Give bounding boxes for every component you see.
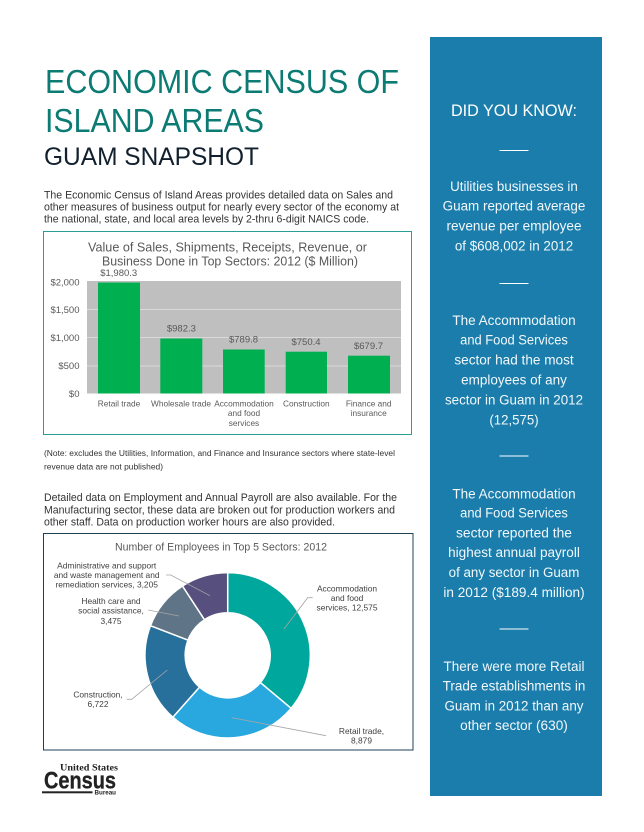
donut labels: and food (331, 593, 364, 603)
category labels (98, 399, 392, 428)
panel: bar chart of sales (44, 232, 412, 434)
fact: highest payroll: and Food Services (460, 506, 568, 520)
y axis labels: $1,500 (50, 305, 80, 316)
fact: retail establishments: Trade establishments in (443, 678, 585, 693)
fact: utilities: of $608,002 in 2012 (455, 238, 573, 253)
employment text (44, 492, 397, 528)
employment text: Manufacturing sector, these data are broken out for production workers and (44, 504, 395, 516)
donut labels: Accommodation (317, 584, 377, 594)
fact: utilities (443, 179, 585, 253)
y axis labels: $2,000 (50, 278, 80, 288)
donut labels: social assistance, (78, 606, 144, 616)
donut labels: services, 12,575 (316, 603, 378, 613)
sidebar heading: DID YOU KNOW: (451, 101, 577, 120)
fact: most employees: (12,575) (489, 412, 539, 427)
intro text: other measures of business output for nearly every sector of the economy at (44, 202, 399, 214)
y axis labels: $500 (58, 361, 80, 372)
fact: highest payroll: in 2012 ($189.4 million) (443, 585, 585, 600)
panel: donut chart of employees (44, 534, 413, 750)
category labels: insurance (351, 408, 387, 418)
donut labels: Health care and (81, 596, 141, 606)
bars (98, 282, 390, 394)
fact: retail establishments: Guam in 2012 than any (444, 698, 584, 713)
y axis labels (50, 278, 80, 400)
fact: most employees: The Accommodation (452, 313, 576, 328)
fact: retail establishments: other sector (630) (460, 718, 568, 733)
donut labels: Administrative and support (57, 560, 157, 570)
fact: highest payroll: The Accommodation (452, 486, 576, 501)
donut labels: remediation services, 3,205 (55, 580, 158, 590)
title: GUAM SNAPSHOT (44, 143, 259, 171)
title: ECONOMIC CENSUS OF (45, 63, 399, 100)
bar value labels: $750.4 (291, 337, 321, 348)
intro text: The Economic Census of Island Areas provides detailed data on Sales and (44, 190, 393, 202)
bar value labels: $982.3 (167, 324, 196, 335)
fact: most employees: sector in Guam in 2012 (445, 392, 583, 407)
fact: utilities: Utilities businesses in (450, 179, 578, 194)
donut labels: and waste management and (54, 570, 160, 580)
donut labels: 3,475 (101, 616, 122, 626)
employment text: other staff. Data on production worker hours are also provided. (44, 516, 335, 528)
fact: highest payroll: of any sector in Guam (449, 565, 579, 580)
chart title: Business Done in Top Sectors: 2012 ($ Million) (102, 254, 358, 268)
plot area with gridlines (87, 281, 401, 394)
fact: most employees: and Food Services (460, 332, 568, 347)
logo: census bureau: United States (60, 764, 118, 774)
fact: highest payroll: sector reported the (456, 525, 572, 540)
title: ISLAND AREAS (45, 102, 264, 139)
donut labels (54, 560, 384, 746)
category labels: services (229, 418, 259, 428)
fact: retail establishments (443, 659, 585, 733)
panel: did you know sidebar (430, 37, 602, 796)
category labels: Wholesale trade (151, 399, 211, 409)
bar value labels: $1,980.3 (100, 268, 137, 279)
note (44, 448, 395, 471)
y axis labels: $0 (69, 389, 80, 400)
intro text: the national, state, and local area levels by 2-thru 6-digit NAICS code. (44, 214, 369, 226)
bar value labels: $789.8 (229, 335, 258, 346)
category labels: Retail trade (98, 399, 141, 409)
donut labels: Retail trade, (339, 726, 384, 736)
note: (Note: excludes the Utilities, Information, and Finance and Insurance sectors where state-level (44, 448, 395, 458)
category labels: and food (228, 408, 261, 418)
chart title (88, 240, 368, 268)
sidebar dividers (500, 150, 528, 629)
fact: most employees: sector had the most (454, 352, 574, 367)
donut labels: 6,722 (88, 699, 109, 709)
chart title: Value of Sales, Shipments, Receipts, Revenue, or (88, 240, 368, 254)
fact: most employees (445, 313, 583, 427)
fact: highest payroll: highest annual payroll (448, 545, 580, 560)
y axis labels: $1,000 (50, 333, 80, 344)
fact: retail establishments: There were more Retail (444, 659, 584, 674)
employment text: Detailed data on Employment and Annual Payroll are also available. For the (44, 492, 397, 504)
logo: census bureau: Bureau (94, 790, 116, 797)
title (44, 63, 399, 171)
bar value labels (100, 268, 383, 352)
fact: utilities: Guam reported average (443, 198, 585, 214)
fact: highest payroll (443, 486, 585, 600)
leader lines (127, 575, 326, 736)
category labels: Construction (283, 399, 330, 409)
logo: census bureau: Census (44, 768, 116, 795)
category labels: Accommodation (214, 399, 274, 409)
intro text (44, 190, 399, 226)
donut labels: 8,879 (351, 736, 372, 746)
bar value labels: $679.7 (354, 341, 383, 352)
donut labels: Construction, (73, 690, 123, 700)
fact: most employees: employees of any (461, 372, 567, 387)
chart title: Number of Employees in Top 5 Sectors: 2012 (115, 542, 327, 554)
donut (145, 573, 310, 738)
fact: utilities: revenue per employee (446, 218, 582, 233)
category labels: Finance and (346, 399, 392, 409)
note: revenue data are not published) (44, 461, 163, 471)
